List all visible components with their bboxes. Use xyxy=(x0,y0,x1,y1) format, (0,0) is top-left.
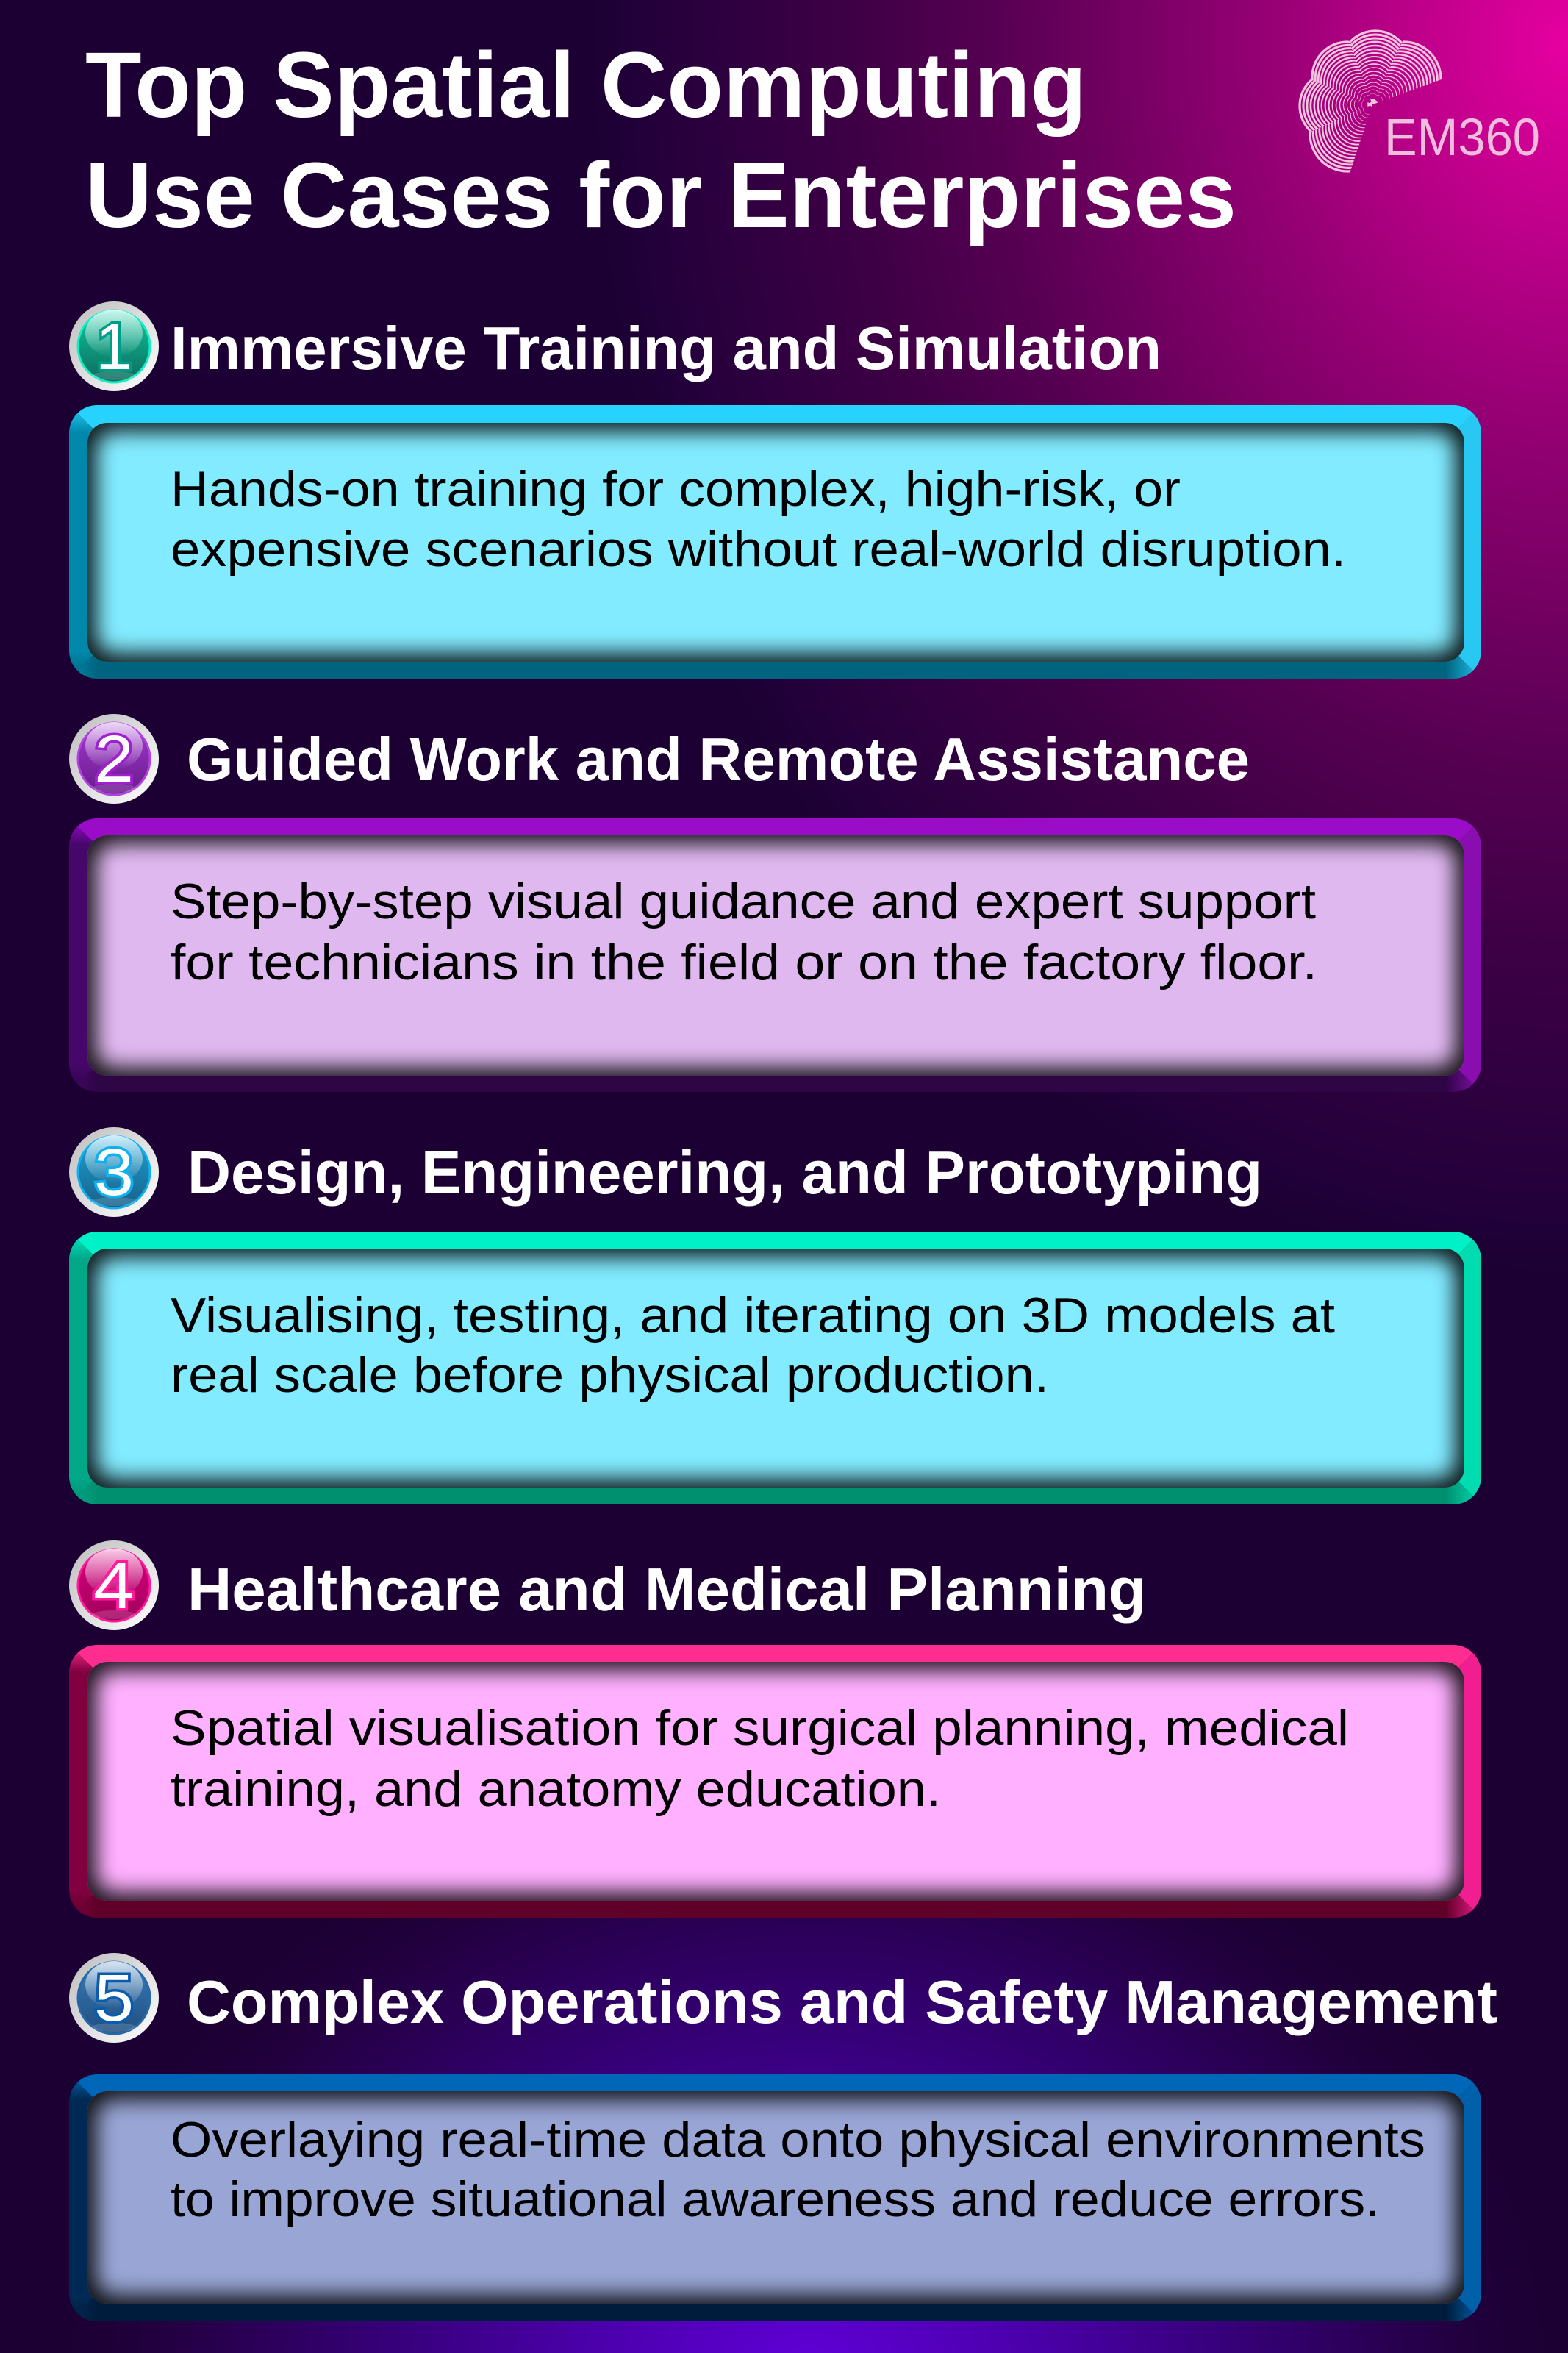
icon: concentric arc shell xyxy=(1300,31,1441,171)
panel text: for technicians in the field or on the factory floor. xyxy=(171,935,1317,990)
panel text xyxy=(171,2112,1425,2227)
panel text: real scale before physical production. xyxy=(171,1347,1049,1403)
panel text: to improve situational awareness and reduce errors. xyxy=(171,2171,1380,2227)
number badge 2: 2 xyxy=(94,723,134,796)
logo: EM360 xyxy=(1300,31,1540,171)
heading 1: Immersive Training and Simulation xyxy=(171,314,1161,382)
panel: Complex Operations xyxy=(69,2074,1481,2321)
panel: Guided Work xyxy=(69,818,1481,1092)
panel: Healthcare xyxy=(69,1645,1481,1918)
number badge 1 xyxy=(69,301,159,391)
heading 3: Design, Engineering, and Prototyping xyxy=(187,1138,1262,1207)
panel text: Spatial visualisation for surgical planning, medical xyxy=(171,1700,1349,1756)
title: Top Spatial Computing xyxy=(85,33,1086,137)
section 5: Complex Operations and Safety Management xyxy=(69,1953,1497,2321)
panel text xyxy=(171,1700,1349,1817)
number badge 5 xyxy=(69,1953,159,2043)
panel text xyxy=(171,461,1346,577)
panel text: Step-by-step visual guidance and expert support xyxy=(171,874,1316,929)
panel text: Visualising, testing, and iterating on 3D models at xyxy=(171,1288,1335,1343)
section 1: Immersive Training and Simulation xyxy=(69,301,1481,679)
panel text xyxy=(171,874,1317,990)
panel: Immersive Training xyxy=(69,405,1481,679)
number badge 4 xyxy=(69,1540,159,1630)
section 3: Design, Engineering, and Prototyping xyxy=(69,1127,1481,1504)
number badge 4: 4 xyxy=(93,1549,135,1623)
logo wordmark: EM360 xyxy=(1384,109,1540,167)
heading 4: Healthcare and Medical Planning xyxy=(187,1555,1146,1624)
number badge 3 xyxy=(69,1127,159,1217)
title: Use Cases for Enterprises xyxy=(85,143,1236,247)
number badge 3: 3 xyxy=(94,1136,134,1210)
section 2: Guided Work and Remote Assistance xyxy=(69,714,1481,1092)
panel text xyxy=(171,1288,1335,1403)
panel text: expensive scenarios without real-world disruption. xyxy=(171,521,1346,577)
heading 2: Guided Work and Remote Assistance xyxy=(187,725,1250,793)
heading 5: Complex Operations and Safety Management xyxy=(187,1968,1497,2036)
panel text: training, and anatomy education. xyxy=(171,1761,941,1817)
panel text: Hands-on training for complex, high-risk, or xyxy=(171,461,1181,517)
number badge 5: 5 xyxy=(94,1962,134,2035)
panel text: Overlaying real-time data onto physical environments xyxy=(171,2112,1425,2168)
section 4: Healthcare and Medical Planning xyxy=(69,1540,1481,1918)
title xyxy=(85,33,1236,247)
panel: Design, Engineering xyxy=(69,1232,1481,1504)
number badge 2 xyxy=(69,714,159,804)
number badge 1: 1 xyxy=(96,310,132,384)
